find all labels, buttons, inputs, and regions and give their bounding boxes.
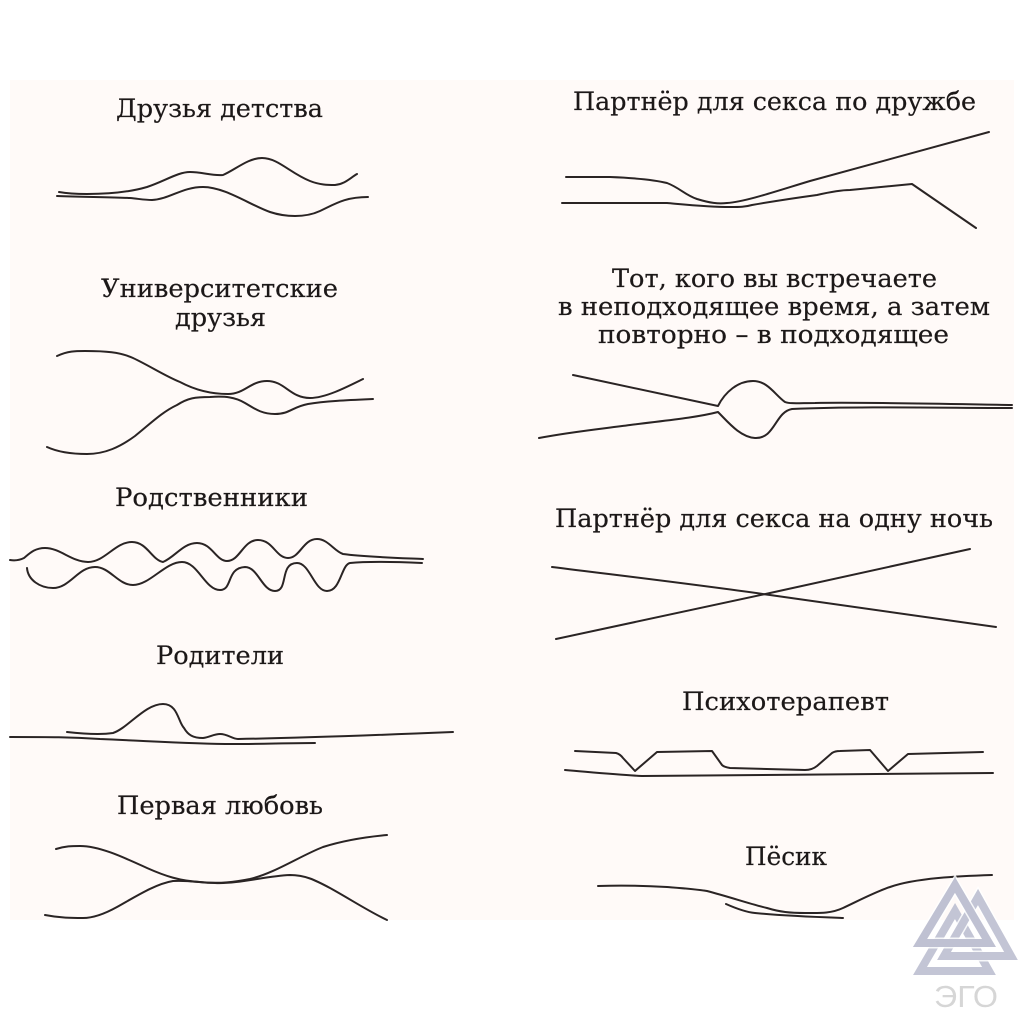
heading: Родители: Родители [156, 641, 284, 670]
curve: Тот, кого вы встречаете [539, 375, 1012, 438]
curve: Друзья детства [57, 158, 368, 216]
curve: Первая любовь [45, 835, 387, 920]
heading: Друзья детства: Друзья детства [116, 94, 323, 123]
curve: Партнёр для секса по дружбе [562, 132, 989, 228]
heading: Партнёр для секса по дружбе: Партнёр для секса по дружбе [573, 87, 976, 116]
heading: Первая любовь: Первая любовь [117, 791, 323, 820]
heading: Университетские друзья [101, 274, 338, 332]
curve: Пёсик [598, 875, 992, 918]
heading: Пёсик: Пёсик [745, 842, 827, 871]
heading: Университетские друзья: Университетские [101, 274, 338, 303]
heading: Университетские друзья: друзья [175, 303, 266, 332]
heading: Партнёр для секса на одну ночь: Партнёр для секса на одну ночь [555, 504, 993, 533]
heading: Тот, кого вы встречаете в неподходящее время: Тот, кого вы встречаете [612, 264, 937, 293]
curve: Партнёр для секса на одну ночь [552, 549, 996, 639]
heading: Тот, кого вы встречаете в неподходящее время: в неподходящее время, а затем [558, 292, 990, 321]
heading: Тот, кого вы встречаете в неподходящее время [558, 264, 990, 349]
curve: Университетские друзья [47, 351, 373, 454]
heading: Тот, кого вы встречаете в неподходящее время: повторно – в подходящее [598, 320, 949, 349]
heading: Родственники: Родственники [115, 483, 308, 512]
logo: ЭГО watermark [920, 885, 1011, 1014]
logo: ЭГО watermark: ЭГО [934, 979, 998, 1014]
curve: Родственники [10, 539, 423, 591]
curve: Психотерапевт [565, 750, 993, 776]
heading: Психотерапевт: Психотерапевт [682, 687, 889, 716]
curve: Родители [10, 704, 453, 744]
